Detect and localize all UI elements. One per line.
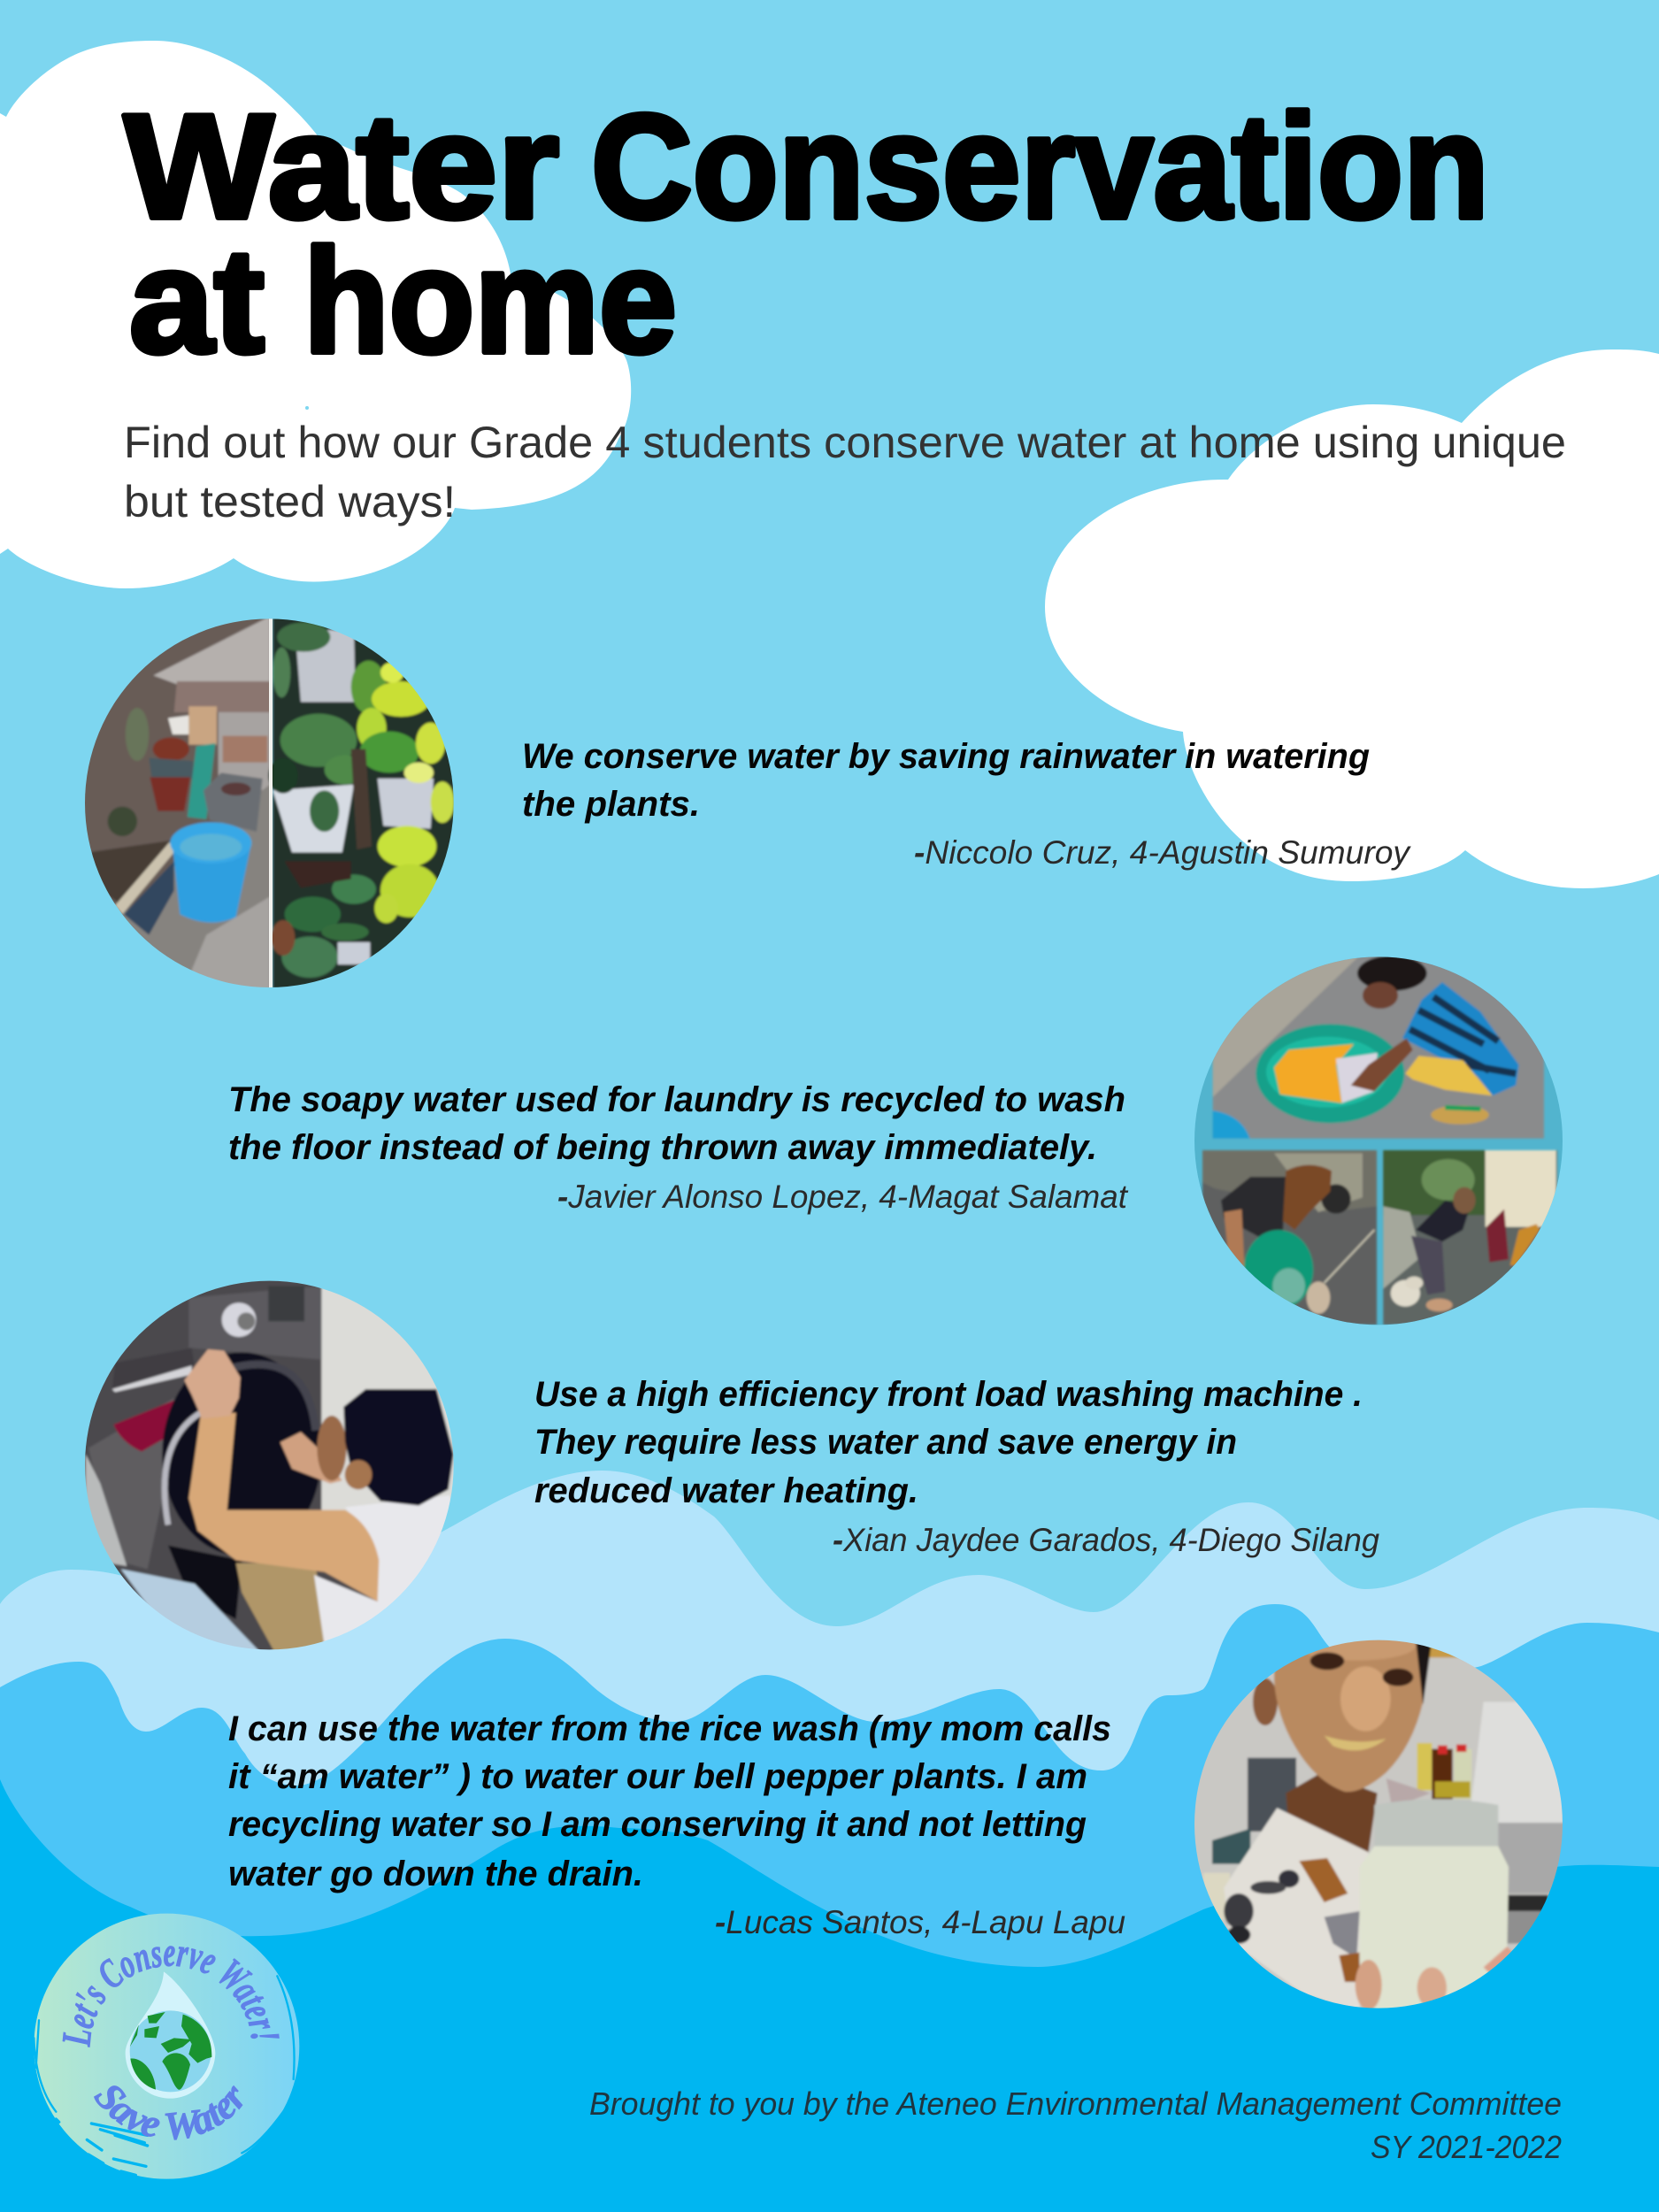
badge top text: Let's Conserve Water! (62, 1946, 280, 2047)
footer credit (589, 2085, 1562, 2165)
quote 4: recycling water so I am conserving it and not letting (228, 1805, 1087, 1844)
quote 2 (228, 1080, 1129, 1215)
badge: Let's Conserve Water (34, 1913, 299, 2179)
quote 3: reduced water heating. (534, 1471, 918, 1510)
subtitle: but tested ways! (124, 477, 456, 526)
quote 1: We conserve water by saving rainwater in watering (522, 737, 1370, 776)
title (124, 83, 1489, 384)
badge rim strokes and ripples (34, 1976, 295, 2179)
quote 1: -Niccolo Cruz, 4-Agustin Sumuroy (914, 834, 1412, 871)
quote 2: The soapy water used for laundry is recycled to wash (228, 1080, 1125, 1119)
photo: boy at front load washing machine (82, 1277, 457, 1655)
footer credit: SY 2021-2022 (1371, 2129, 1562, 2165)
title: Conservation (591, 83, 1489, 250)
quote 4: it “am water” ) to water our bell pepper plants. I am (228, 1757, 1087, 1796)
subtitle: Find out how our Grade 4 students conserve water at home using unique (124, 418, 1566, 467)
title: at (129, 218, 265, 384)
footer credit: Brought to you by the Ateneo Environmental Management Committee (589, 2085, 1562, 2122)
quote 4: water go down the drain. (228, 1855, 643, 1893)
photo: recycled laundry water (1192, 953, 1569, 1330)
title: Water (124, 83, 559, 250)
quote 2: the floor instead of being thrown away immediately. (228, 1128, 1097, 1167)
badge bottom text: Save Water (94, 2085, 242, 2140)
quote 2: -Javier Alonso Lopez, 4-Magat Salamat (557, 1179, 1129, 1215)
wave: deep layer (0, 1779, 1659, 2212)
wave: middle layer (0, 1604, 1659, 2212)
badge disc (34, 1914, 299, 2179)
cloud: right (1045, 349, 1659, 888)
subtitle (124, 418, 1566, 526)
cloud: top left (0, 41, 631, 588)
quote 1: the plants. (522, 785, 700, 824)
quote 3: They require less water and save energy in (534, 1423, 1237, 1462)
quote 3: Use a high efficiency front load washing machine . (534, 1375, 1363, 1414)
quote 4: -Lucas Santos, 4-Lapu Lapu (715, 1904, 1125, 1940)
title: home (303, 218, 677, 384)
quote 3 (534, 1375, 1379, 1558)
photo: rainwater bucket and plants (82, 613, 462, 994)
quote 1 (522, 737, 1412, 871)
badge globe (130, 2010, 211, 2092)
photo: child holding rice wash water jar (1192, 1631, 1569, 2015)
quote 4 (228, 1709, 1125, 1940)
wave: lightest layer (0, 1471, 1659, 2212)
badge water drop (126, 1971, 215, 2099)
quote 4: I can use the water from the rice wash (my mom calls (228, 1709, 1111, 1748)
quote 3: -Xian Jaydee Garados, 4-Diego Silang (833, 1522, 1379, 1558)
